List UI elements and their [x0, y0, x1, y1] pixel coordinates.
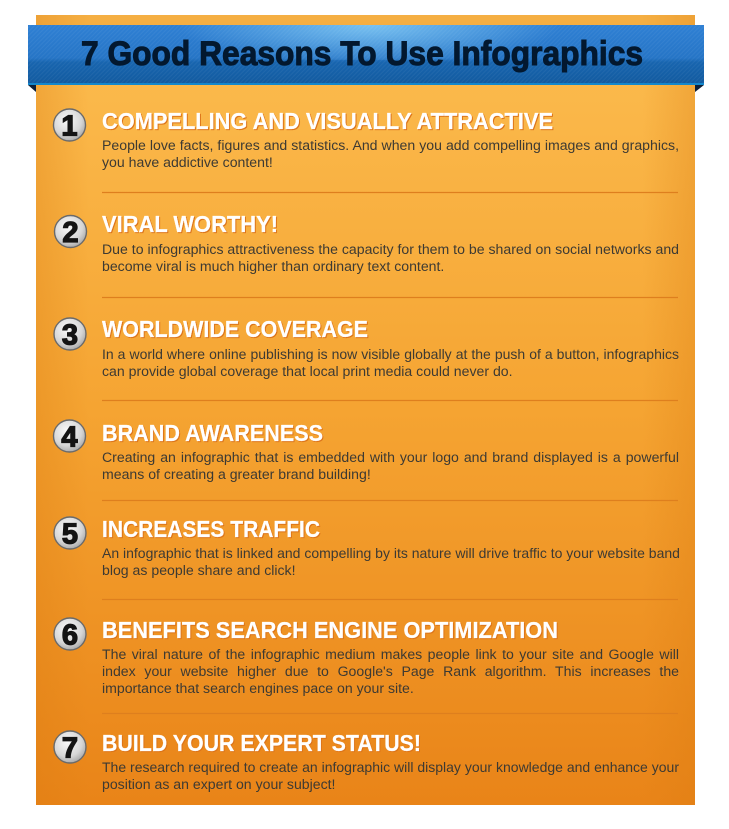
icon: number 2 badge: 2 — [62, 217, 79, 249]
icon: number 7 badge: 7 — [62, 732, 78, 764]
reason 3 — [54, 316, 692, 380]
text 4 — [102, 449, 692, 483]
banner: title ribbon — [28, 25, 704, 92]
heading 1: COMPELLING AND VISUALLY ATTRACTIVE — [102, 108, 553, 134]
text 6: The viral nature of the infographic medium makes people link to your site and Google will — [102, 646, 679, 662]
title: 7 Good Reasons To Use Infographics — [81, 35, 643, 73]
text 6: importance that search engines pace on your site. — [102, 680, 414, 696]
reason 6 — [54, 617, 692, 697]
reason 2 — [54, 211, 692, 275]
text 1: People love facts, figures and statistics. And when you add compelling images and graphics, — [102, 137, 679, 153]
reason 7 — [54, 730, 692, 793]
icon: number 3 badge: 3 — [62, 320, 78, 352]
text 7: position as an expert on your subject! — [102, 776, 335, 792]
icon: number 4 badge — [54, 420, 86, 454]
text 2: Due to infographics attractiveness the capacity for them to be shared on social networks and — [102, 241, 679, 257]
icon: number 7 badge — [54, 731, 86, 764]
icon: number 5 badge — [54, 517, 86, 550]
text 6 — [102, 646, 692, 697]
text 5: blog as people share and click! — [102, 562, 296, 578]
text 4: means of creating a greater brand building! — [102, 466, 371, 482]
text 2 — [102, 241, 692, 275]
text 3: can provide global coverage that local print media could never do. — [102, 363, 513, 379]
text 6: index your website higher due to Google's Page Rank algorithm. This increases the — [102, 663, 679, 679]
heading 4: BRAND AWARENESS — [102, 420, 323, 446]
icon: number 4 badge: 4 — [61, 422, 78, 454]
heading 6: BENEFITS SEARCH ENGINE OPTIMIZATION — [102, 617, 558, 643]
text 7 — [102, 759, 692, 793]
text 4: Creating an infographic that is embedded with your logo and brand displayed is a powerful — [102, 449, 679, 465]
icon: number 1 badge: 1 — [61, 110, 78, 142]
heading 5: INCREASES TRAFFIC — [102, 516, 320, 542]
reason 1 — [54, 108, 692, 171]
reason 4 — [54, 420, 692, 483]
text 5: An infographic that is linked and compelling by its nature will drive traffic to your website band — [102, 545, 680, 561]
text 1 — [102, 137, 692, 171]
heading 3: WORLDWIDE COVERAGE — [102, 316, 368, 342]
text 3: In a world where online publishing is now visible globally at the push of a button, infographics — [102, 346, 679, 362]
icon: number 6 badge — [54, 618, 86, 652]
text 1: you have addictive content! — [102, 154, 273, 170]
text 2: become viral is much higher than ordinary text content. — [102, 258, 444, 274]
icon: number 2 badge — [54, 216, 86, 249]
icon: number 6 badge: 6 — [62, 620, 78, 652]
reason 5 — [54, 516, 692, 579]
icon: number 1 badge — [54, 109, 86, 142]
text 5 — [102, 545, 692, 579]
heading 2: VIRAL WORTHY! — [102, 211, 278, 237]
text 3 — [102, 346, 692, 380]
icon: number 5 badge: 5 — [62, 518, 78, 550]
heading 7: BUILD YOUR EXPERT STATUS! — [102, 730, 421, 756]
text 7: The research required to create an infographic will display your knowledge and enhance your — [102, 759, 679, 775]
icon: number 3 badge — [54, 318, 86, 352]
